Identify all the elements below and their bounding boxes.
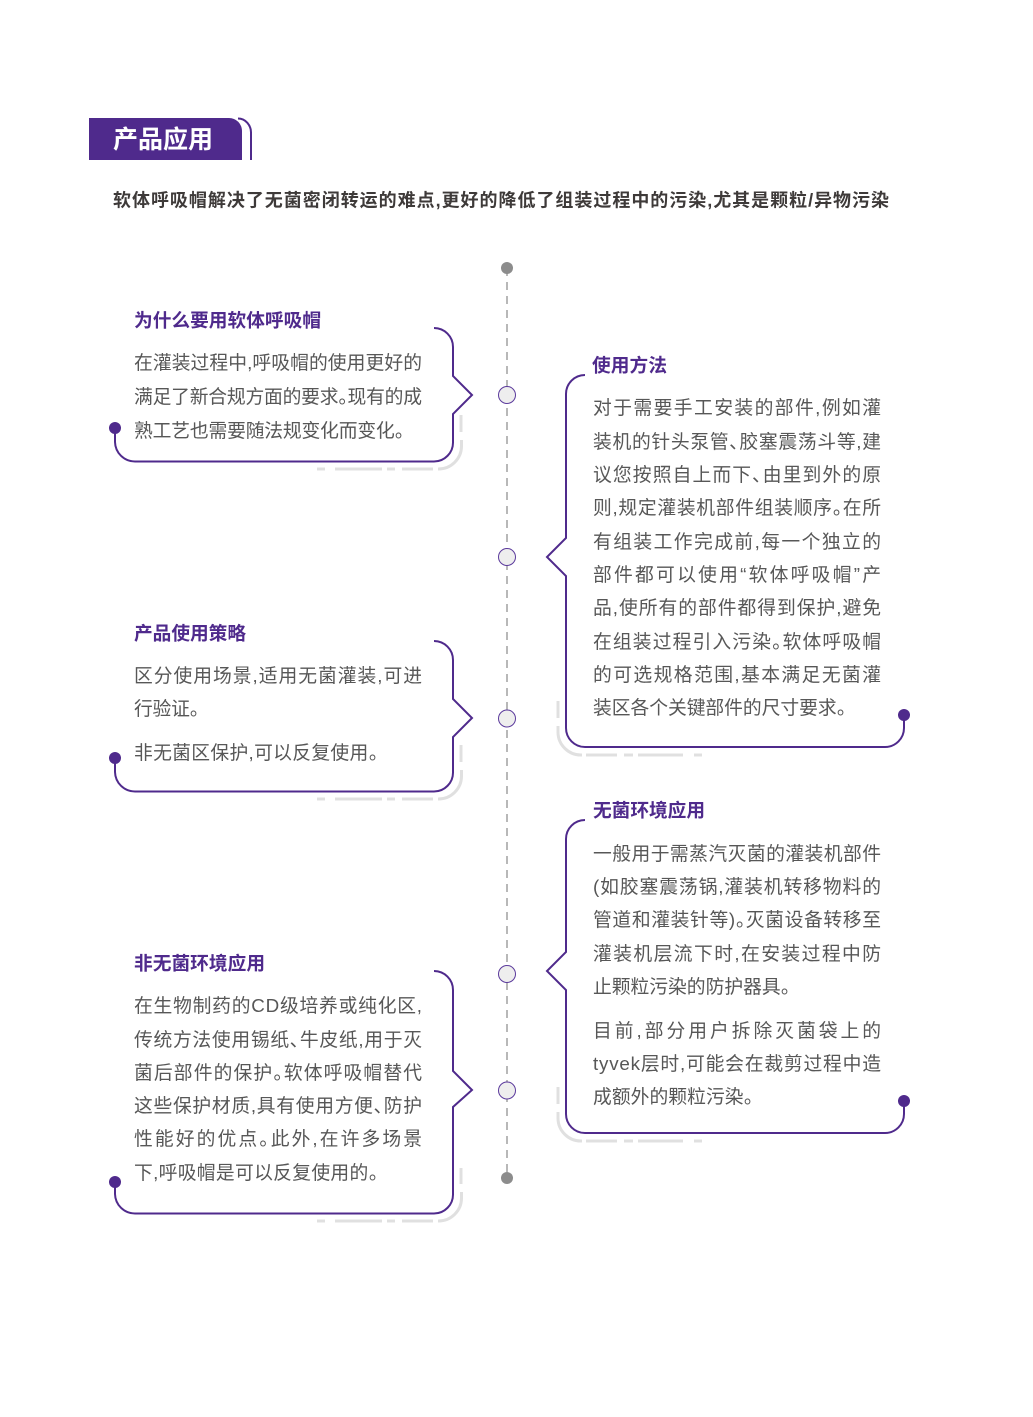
panel: 为什么要用软体呼吸帽	[109, 310, 472, 469]
panel text	[593, 843, 881, 1107]
panel text: 装区各个关键部件的尺寸要求。	[593, 697, 846, 718]
panel title: 非无菌环境应用	[134, 953, 265, 974]
panel text: 区分使用场景,适用无菌灌装,可进	[134, 665, 422, 686]
panel title: 产品使用策略	[134, 623, 246, 644]
panel text	[134, 995, 422, 1183]
subtitle: 软体呼吸帽解决了无菌密闭转运的难点,更好的降低了组装过程中的污染,尤其是颗粒/异物污染	[113, 190, 889, 210]
panel text: 下,呼吸帽是可以反复使用的。	[134, 1162, 378, 1183]
panel text: 菌后部件的保护。软体呼吸帽替代	[134, 1062, 422, 1083]
panel text: 对于需要手工安装的部件,例如灌	[593, 397, 881, 418]
panel title: 无菌环境应用	[593, 800, 705, 821]
panel text: 则,规定灌装机部件组装顺序。在所	[593, 497, 881, 518]
panel: 产品使用策略	[109, 623, 472, 799]
panel text: 装机的针头泵管、胶塞震荡斗等,建	[593, 431, 881, 452]
panel: 无菌环境应用	[547, 800, 910, 1141]
section heading: 产品应用: 产品应用	[113, 125, 213, 154]
panel text: 灌装机层流下时,在安装过程中防	[593, 943, 881, 964]
panel: 使用方法	[547, 355, 910, 755]
panel text: 在生物制药的CD级培养或纯化区,	[134, 995, 422, 1016]
panel text: 传统方法使用锡纸、牛皮纸,用于灭	[134, 1029, 422, 1050]
panel text: 止颗粒污染的防护器具。	[593, 976, 790, 997]
panel text: 一般用于需蒸汽灭菌的灌装机部件	[593, 843, 881, 864]
panel text	[134, 352, 422, 441]
panel text: 管道和灌装针等)。灭菌设备转移至	[593, 909, 881, 930]
section heading: 产品应用	[89, 118, 251, 160]
panel outline	[109, 641, 472, 799]
timeline axis	[498, 262, 516, 1184]
panel outline	[547, 820, 910, 1141]
panel text: 行验证。	[134, 698, 199, 719]
panel text: 议您按照自上而下、由里到外的原	[593, 464, 881, 485]
panel text: 在组装过程引入污染。软体呼吸帽	[593, 631, 881, 652]
panel text: 成额外的颗粒污染。	[593, 1086, 753, 1107]
panel text: tyvek层时,可能会在裁剪过程中造	[593, 1053, 881, 1074]
panel text: 部件都可以使用“软体呼吸帽”产	[593, 564, 881, 585]
panel text: 有组装工作完成前,每一个独立的	[593, 531, 881, 552]
panel title: 为什么要用软体呼吸帽	[134, 310, 321, 331]
panel outline	[109, 971, 472, 1221]
panel text: 性能好的优点。此外,在许多场景	[134, 1128, 422, 1149]
panel text: 在灌装过程中,呼吸帽的使用更好的	[134, 352, 422, 373]
panel text: 熟工艺也需要随法规变化而变化。	[134, 420, 404, 441]
panel text	[593, 397, 881, 718]
panel title: 使用方法	[592, 355, 667, 376]
panel text: 目前,部分用户拆除灭菌袋上的	[593, 1020, 881, 1041]
panel outline	[547, 375, 910, 755]
panel text: 这些保护材质,具有使用方便、防护	[134, 1095, 422, 1116]
panel text: (如胶塞震荡锅,灌装机转移物料的	[593, 876, 881, 897]
panel text: 的可选规格范围,基本满足无菌灌	[593, 664, 881, 685]
panel text: 满足了新合规方面的要求。现有的成	[134, 386, 422, 407]
panel: 非无菌环境应用	[109, 953, 472, 1221]
panel text: 非无菌区保护,可以反复使用。	[134, 742, 378, 763]
panel outline	[109, 328, 472, 469]
panel text: 品,使所有的部件都得到保护,避免	[593, 597, 881, 618]
panel text	[134, 665, 422, 763]
